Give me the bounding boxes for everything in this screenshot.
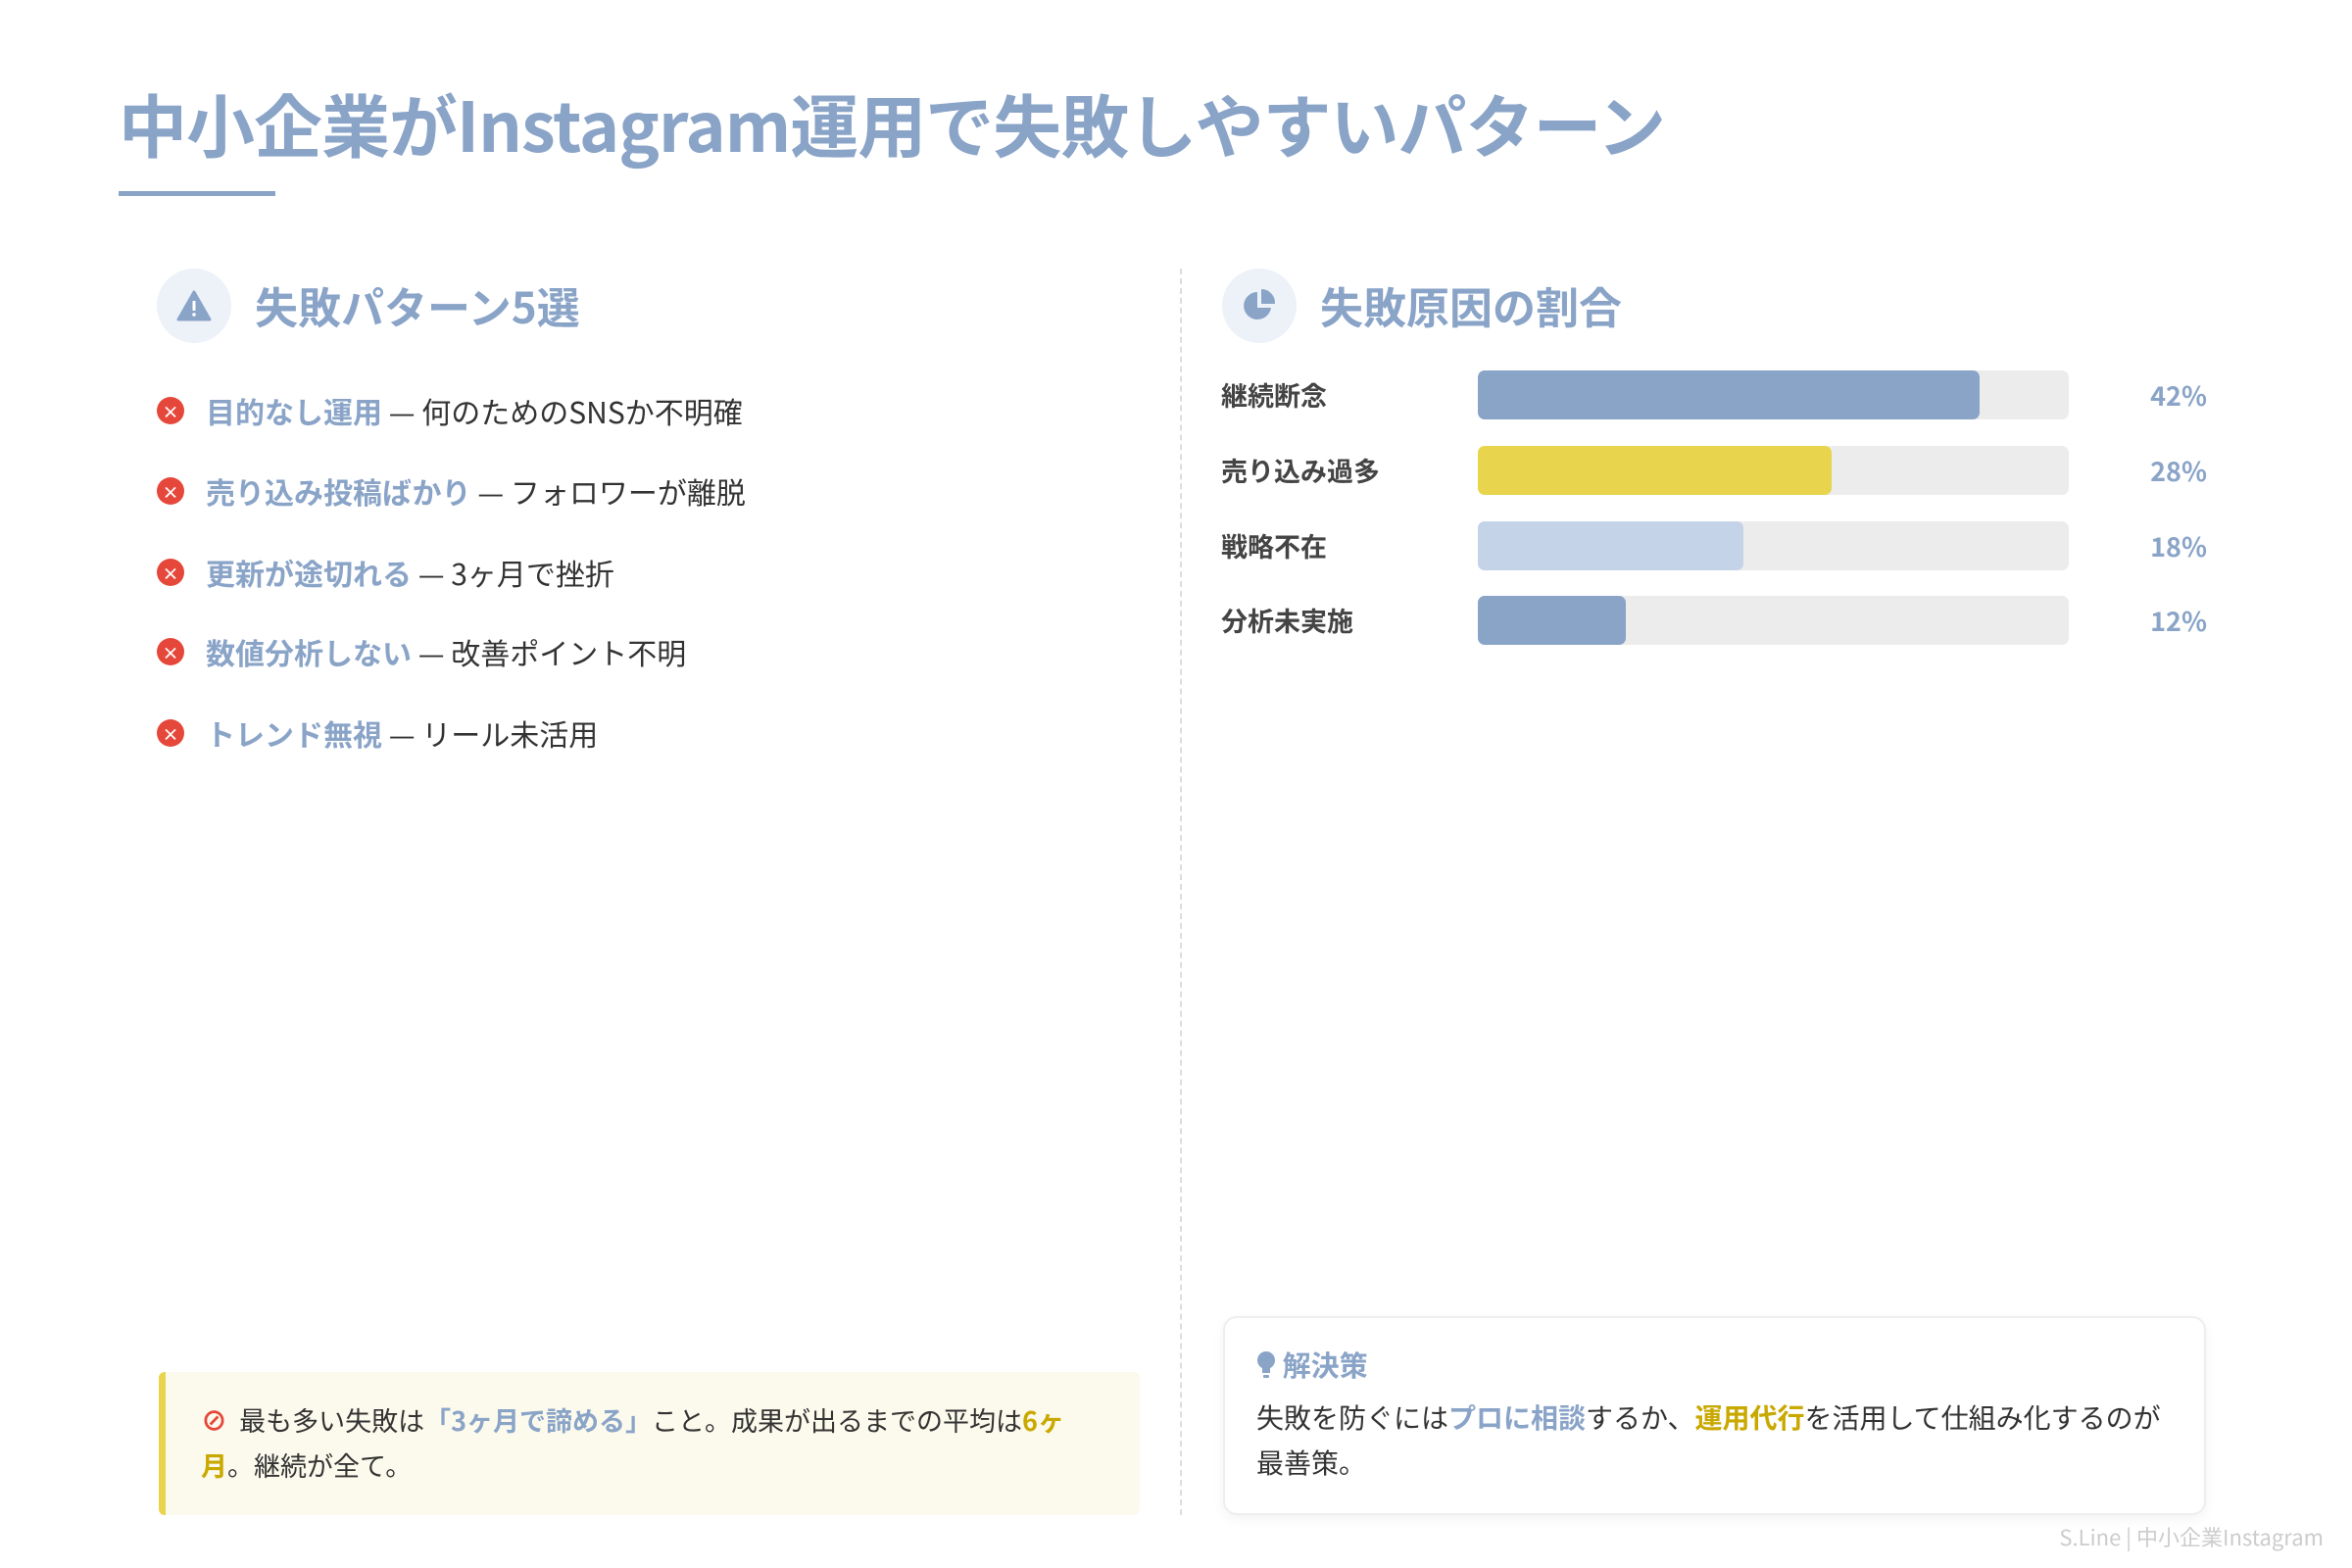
list item 1: 目的なし運用 [206, 389, 382, 432]
list item 4: × [163, 639, 178, 664]
bar: 売り込み過多: 売り込み過多 [1221, 451, 1380, 489]
list item 2: — フォロワーが離脱 [477, 469, 746, 513]
list item 5: トレンド無視 [206, 711, 382, 755]
panel: solution card [1223, 1316, 2206, 1515]
title underline [119, 191, 275, 196]
bar: 分析未実施: 分析未実施 [1221, 601, 1353, 639]
solution heading: 解決策 [1283, 1344, 1368, 1385]
bar: 継続断念: 42% [2150, 375, 2207, 414]
bar: 分析未実施: 12% [2150, 601, 2207, 639]
list item 5 [157, 711, 598, 755]
list item 3: — 3ヶ月で挫折 [418, 551, 614, 594]
icon: pie chart [1222, 269, 1297, 343]
list item 4: — 改善ポイント不明 [418, 630, 686, 673]
list item 4: 数値分析しない [206, 630, 412, 673]
list item 5: — リール未活用 [389, 711, 598, 755]
bar: 戦略不在: 戦略不在 [1221, 526, 1327, 564]
list item 1: × [163, 398, 178, 423]
heading: 失敗パターン5選 [255, 273, 580, 336]
bar: 売り込み過多 [1221, 446, 2207, 495]
list item 3 [157, 551, 614, 594]
solution text: 最善策。 [1256, 1443, 1366, 1482]
list item 3: × [163, 561, 178, 584]
icon: warning [157, 269, 231, 343]
heading: 失敗原因の割合 [1320, 273, 1622, 336]
bar chart [1221, 370, 2207, 645]
bar: 売り込み過多: 28% [2150, 451, 2207, 489]
bar: 戦略不在 [1221, 521, 2207, 570]
list item 1: — 何のためのSNSか不明確 [389, 389, 743, 432]
title: 中小企業がInstagram運用で失敗しやすいパターン [119, 74, 1665, 172]
list item 3: 更新が途切れる [206, 551, 412, 594]
panel: failure patterns [157, 269, 580, 343]
solution text: 失敗を防ぐにはプロに相談するか、運用代行を活用して仕組み化するのが [1256, 1397, 2161, 1437]
list item 2: × [163, 478, 178, 504]
callout: warning note: ⊘ 最も多い失敗は「3ヶ月で諦める」こと。成果が出るまでの平均は6ヶ月。継続が全て。 [201, 1400, 1064, 1484]
bar: 継続断念 [1221, 370, 2207, 419]
bar: 分析未実施 [1221, 596, 2207, 645]
list item 4 [157, 630, 686, 673]
list item 5: × [163, 721, 178, 745]
list item 1 [157, 389, 743, 432]
list item 2 [157, 469, 746, 513]
bar: 継続断念: 継続断念 [1221, 375, 1327, 414]
footer: S.Line | 中小企業Instagram [2059, 1521, 2324, 1552]
solution text [1256, 1397, 2161, 1482]
panel: cause ratio [1222, 269, 1622, 343]
callout: warning note [159, 1372, 1140, 1515]
bar: 戦略不在: 18% [2150, 526, 2207, 564]
list item 2: 売り込み投稿ばかり [206, 469, 471, 513]
